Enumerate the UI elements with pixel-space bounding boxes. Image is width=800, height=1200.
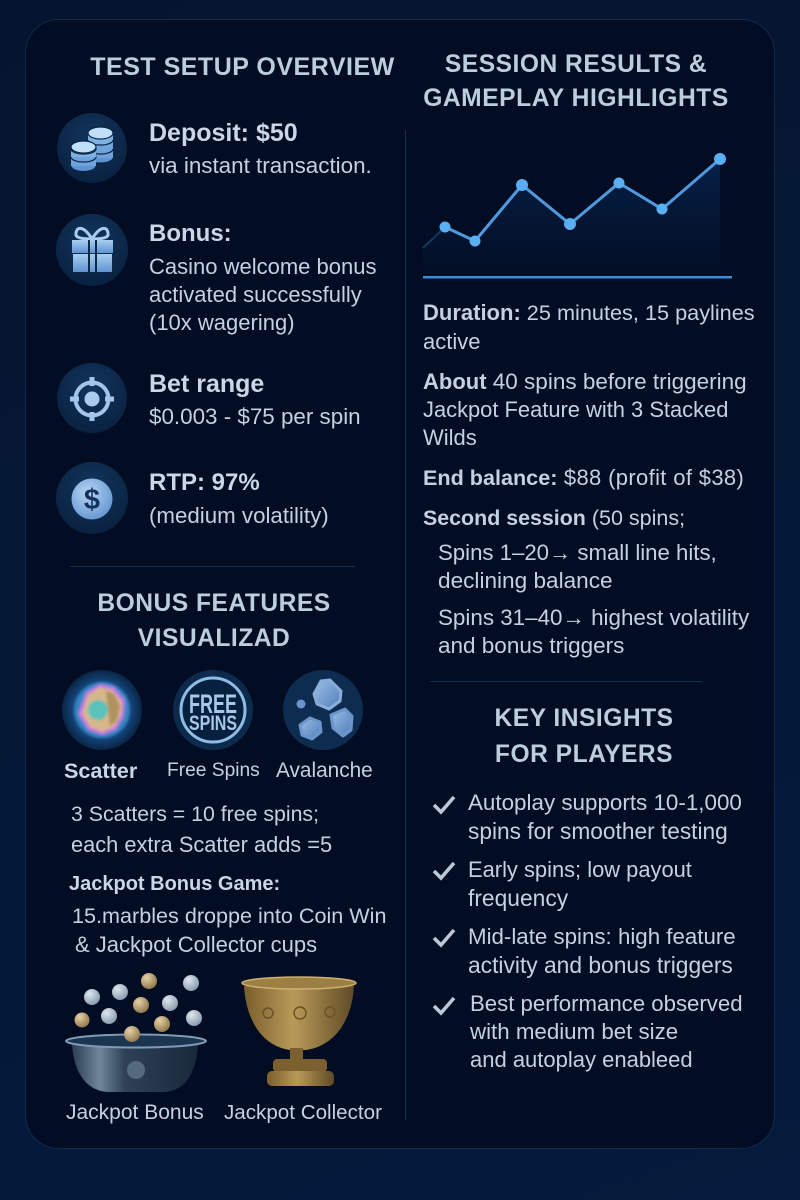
icon: dollar coin: $ [84,484,100,516]
insight 3: Mid-late spins: high feature [468,924,736,949]
heading: session results line 1: SESSION RESULTS & [445,51,707,78]
about spins line 3: Wilds [423,425,477,450]
duration text line 2: active [423,329,480,354]
icon: dollar coin [56,462,128,534]
icon: marbles and bowl [65,973,207,1092]
icon: coins [57,113,127,183]
insight 2: Early spins; low payout [468,857,692,882]
insight 4 line 3: and autoplay enableed [470,1047,693,1072]
panel: bonus features [62,590,386,1124]
icon: gift [56,214,128,286]
duration text: Duration: 25 minutes, 15 paylines [423,300,755,325]
heading: key insights line 1: KEY INSIGHTS [494,705,674,732]
heading: session results line 2: GAMEPLAY HIGHLIGHTS [423,85,729,112]
icon: free spins: SPINS [189,712,237,735]
bet range detail: $0.003 - $75 per spin [149,404,361,429]
icon: check 4 [432,996,456,1016]
icon: check 3 [432,928,456,948]
column divider [405,130,406,1120]
deposit detail: via instant transaction. [149,153,372,178]
label: jackpot collector: Jackpot Collector [224,1101,382,1124]
heading: bonus features line 1: BONUS FEATURES [97,590,331,617]
icon: target [57,363,127,433]
rtp text: RTP: 97% [149,469,260,496]
jackpot bonus heading: Jackpot Bonus Game: [69,873,280,895]
left divider [70,566,355,567]
right divider [430,681,702,682]
icon: free spins: FREE [189,689,237,719]
panel: session results [422,51,755,658]
panel: test setup overview [56,53,395,534]
heading: bonus features line 2: VISUALIZAD [138,625,290,652]
rtp detail: (medium volatility) [149,503,329,528]
heading: test setup overview: TEST SETUP OVERVIEW [90,53,395,81]
insight 4: Best performance observed [470,991,743,1016]
insight 1: Autoplay supports 10-1,000 [468,790,742,815]
scatter rule line 1: 3 Scatters = 10 free spins; [71,802,319,826]
second session text: Second session (50 spins; [423,506,685,530]
heading: key insights line 2: FOR PLAYERS [495,741,673,768]
icon: free spins [173,670,253,750]
insight 2 line 2: frequency [468,885,568,911]
scatter rule line 2: each extra Scatter adds =5 [71,832,332,857]
about spins line 2: Jackpot Feature with 3 Stacked [423,397,728,422]
bet range text: Bet range [149,370,264,398]
line chart [422,153,732,278]
end balance text: End balance: $88 (profit of $38) [423,465,744,490]
icon: check 1 [432,796,456,815]
panel: key insights [432,705,743,1072]
insight 3 line 2: activity and bonus triggers [468,952,733,978]
label: jackpot bonus: Jackpot Bonus [66,1101,204,1124]
label: scatter: Scatter [64,758,137,783]
icon: golden cup [241,976,357,1086]
jackpot rule line 1: 15.marbles droppe into Coin Win [72,903,386,928]
icon: check 2 [432,862,456,881]
spins 31-40 line 2: and bonus triggers [438,633,624,658]
label: avalanche: Avalanche [276,759,373,782]
deposit text: Deposit: $50 [149,119,298,147]
insight 4 line 2: with medium bet size [470,1019,678,1044]
label: free spins: Free Spins [167,760,260,781]
bonus detail line 3: (10x wagering) [149,310,295,335]
bonus text: Bonus: [149,220,232,247]
jackpot rule line 2: & Jackpot Collector cups [75,932,317,957]
icon: scatter [62,670,142,750]
insight 1 line 2: spins for smoother testing [468,818,728,844]
about spins text: About 40 spins before triggering [423,369,747,394]
spins 1-20 line 2: declining balance [438,568,613,593]
bonus detail: Casino welcome bonus [149,254,376,279]
bonus detail line 2: activated successfully [149,282,362,307]
spins 31-40: Spins 31–40→ highest volatility [438,605,749,630]
spins 1-20: Spins 1–20→ small line hits, [438,540,717,565]
icon: avalanche [283,670,363,750]
